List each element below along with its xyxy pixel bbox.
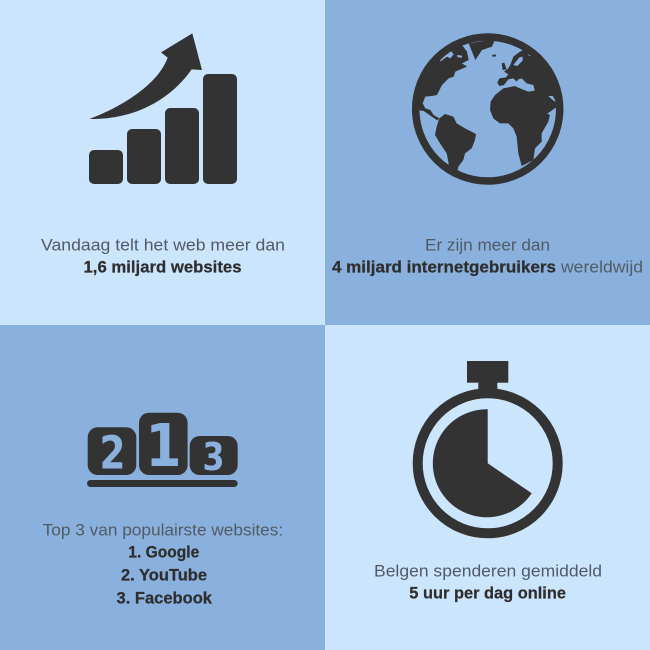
icon: growth bar chart with arrow: [89, 33, 237, 184]
text: top 3 list: 1. Google: [128, 542, 199, 562]
panel: websites: [0, 0, 325, 325]
text: websites statistic: [41, 236, 285, 276]
text: internet users statistic: Er zijn meer dan: [425, 236, 550, 254]
icon: podium: 3: [202, 435, 224, 479]
icon: podium: [87, 411, 238, 487]
text: time statistic: [374, 562, 602, 603]
icon: podium: 1: [146, 411, 182, 480]
text: top 3 list: Top 3 van populairste websites:: [43, 521, 283, 540]
icon: stopwatch: [418, 361, 558, 533]
text: time statistic: Belgen spenderen gemiddeld: [374, 562, 602, 581]
icon: globe: [412, 33, 564, 185]
panel: internet users: [325, 0, 650, 325]
panel: top 3 websites: [0, 325, 325, 650]
text: top 3 list: 3. Facebook: [116, 588, 213, 608]
text: time statistic: 5 uur per dag online: [409, 584, 566, 603]
text: top 3 list: [43, 521, 283, 608]
text: websites statistic: Vandaag telt het web meer dan: [41, 236, 285, 254]
text: internet users statistic: [332, 236, 643, 276]
text: websites statistic: 1,6 miljard websites: [84, 258, 242, 276]
panel: time online: [325, 325, 650, 650]
text: internet users statistic: wereldwijd: [560, 258, 643, 276]
text: top 3 list: 2. YouTube: [121, 566, 207, 584]
text: internet users statistic: 4 miljard internetgebruikers: [332, 258, 556, 276]
icon: podium: 2: [100, 426, 126, 479]
